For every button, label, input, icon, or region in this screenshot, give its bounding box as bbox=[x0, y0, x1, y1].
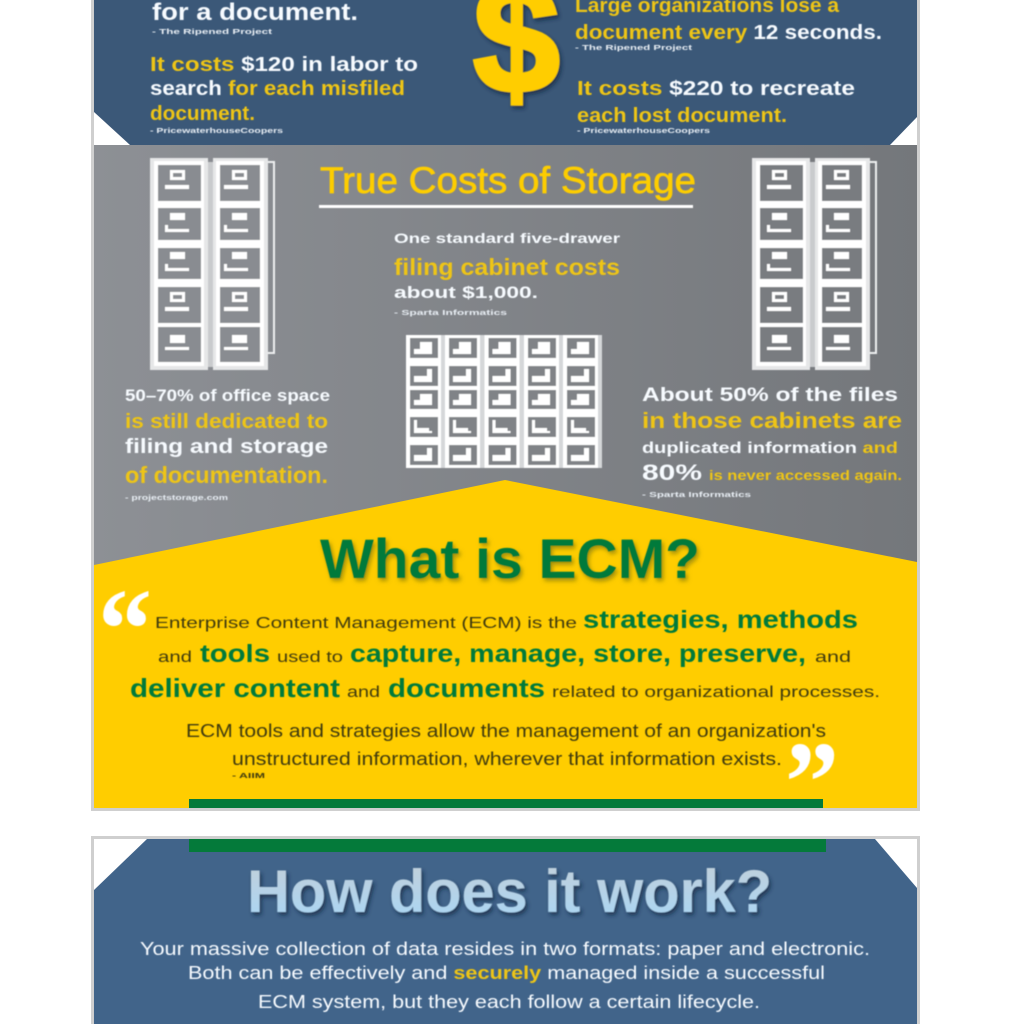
text block: office space bbox=[125, 386, 330, 502]
text block: ECM definition: and bbox=[815, 649, 851, 666]
icon: opening quotation mark: “ bbox=[98, 566, 152, 693]
icon: wide filing cabinet bank bbox=[406, 335, 602, 468]
icon: left filing cabinet bbox=[150, 158, 274, 370]
text block: office space: is still dedicated to bbox=[125, 411, 328, 433]
text block: duplicate files bbox=[642, 385, 902, 499]
text block: left document facts bbox=[150, 0, 418, 135]
text block: duplicate files: is never accessed again. bbox=[709, 467, 902, 483]
heading: what is ECM: What is ECM? bbox=[320, 527, 700, 590]
text block: left document facts: It costs $120 in labor to bbox=[150, 54, 418, 76]
text block: ECM definition: ECM tools and strategies allow the management of an organization's bbox=[186, 721, 826, 741]
text block: ECM definition: and bbox=[158, 649, 192, 666]
panel: what is ECM background bbox=[94, 480, 917, 808]
text block: ECM definition: deliver content bbox=[130, 673, 340, 703]
text block: ECM definition: tools bbox=[200, 640, 270, 668]
text block: lifecycle introduction: Both can be effectively and securely managed inside a successful bbox=[188, 963, 825, 983]
text block: ECM definition: and bbox=[347, 684, 380, 701]
text block: ECM definition: Enterprise Content Management (ECM) is the bbox=[155, 615, 577, 632]
text block: right document facts bbox=[575, 0, 882, 135]
text block: left document facts: search for each misfiled bbox=[150, 78, 405, 100]
text block: lifecycle introduction bbox=[140, 939, 870, 1012]
text block: duplicate files: 80% bbox=[642, 460, 702, 485]
text block: right document facts: document every 12 seconds. bbox=[575, 22, 882, 44]
panel: how does it work bbox=[91, 836, 920, 1024]
text block: lifecycle introduction: Your massive collection of data resides in two formats: paper and electronic. bbox=[140, 939, 870, 959]
text block: lifecycle introduction: ECM system, but they each follow a certain lifecycle. bbox=[258, 992, 760, 1012]
green bar: top of lower section bbox=[189, 839, 826, 852]
text block: left document facts: document. bbox=[150, 103, 255, 125]
corner: white notch right bbox=[875, 839, 917, 888]
panel: true costs of storage background bbox=[94, 145, 917, 570]
green bar: bottom of upper section bbox=[189, 799, 823, 808]
text block: ECM definition: capture, manage, store, preserve, bbox=[350, 640, 806, 668]
text block: filing cabinet cost bbox=[394, 230, 621, 317]
text block: office space: filing and storage bbox=[125, 436, 328, 458]
text block: right document facts: It costs $220 to recreate bbox=[577, 78, 855, 100]
text block: ECM definition: strategies, methods bbox=[583, 606, 858, 634]
text block: duplicate files: duplicated information and bbox=[642, 440, 898, 457]
text block: office space: - projectstorage.com bbox=[125, 495, 228, 502]
text block: office space: 50–70% of office space bbox=[125, 386, 330, 405]
text block: duplicate files: in those cabinets are bbox=[642, 408, 902, 433]
heading: true costs of storage: True Costs of Storage bbox=[320, 160, 696, 201]
text block: filing cabinet cost: - Sparta Informatics bbox=[394, 310, 507, 317]
corner: white notch left bbox=[94, 839, 147, 890]
text block: left document facts: - The Ripened Project bbox=[152, 29, 273, 36]
text block: filing cabinet cost: about $1,000. bbox=[394, 283, 538, 302]
icon: right filing cabinet bbox=[752, 158, 876, 370]
text block: left document facts: - PricewaterhouseCoopers bbox=[150, 128, 283, 135]
text block: right document facts: - The Ripened Project bbox=[575, 45, 693, 52]
text block: ECM definition: documents bbox=[388, 673, 545, 703]
text block: ECM definition: - AIIM bbox=[232, 773, 265, 780]
panel: document cost facts bbox=[94, 0, 917, 146]
text block: ECM definition: related to organizational processes. bbox=[552, 684, 880, 701]
text block: ECM definition bbox=[130, 606, 880, 780]
corner: white notch right bbox=[890, 117, 917, 145]
heading: how does it work: How does it work? bbox=[247, 858, 772, 925]
text block: right document facts: each lost document. bbox=[577, 105, 787, 127]
text block: filing cabinet cost: One standard five-drawer bbox=[394, 230, 621, 246]
text block: duplicate files: About 50% of the files bbox=[642, 385, 898, 406]
text block: filing cabinet cost: filing cabinet costs bbox=[394, 254, 620, 280]
text block: ECM definition: unstructured information, wherever that information exists. bbox=[232, 749, 782, 769]
text block: office space: of documentation. bbox=[125, 462, 328, 488]
text block: right document facts: - PricewaterhouseCoopers bbox=[577, 128, 710, 135]
text block: ECM definition: used to bbox=[277, 649, 343, 666]
corner: white notch left bbox=[94, 112, 130, 145]
panel: upper infographic section bbox=[91, 0, 920, 811]
text block: duplicate files: - Sparta Informatics bbox=[642, 492, 751, 499]
icon: closing quotation mark: ” bbox=[785, 719, 839, 846]
